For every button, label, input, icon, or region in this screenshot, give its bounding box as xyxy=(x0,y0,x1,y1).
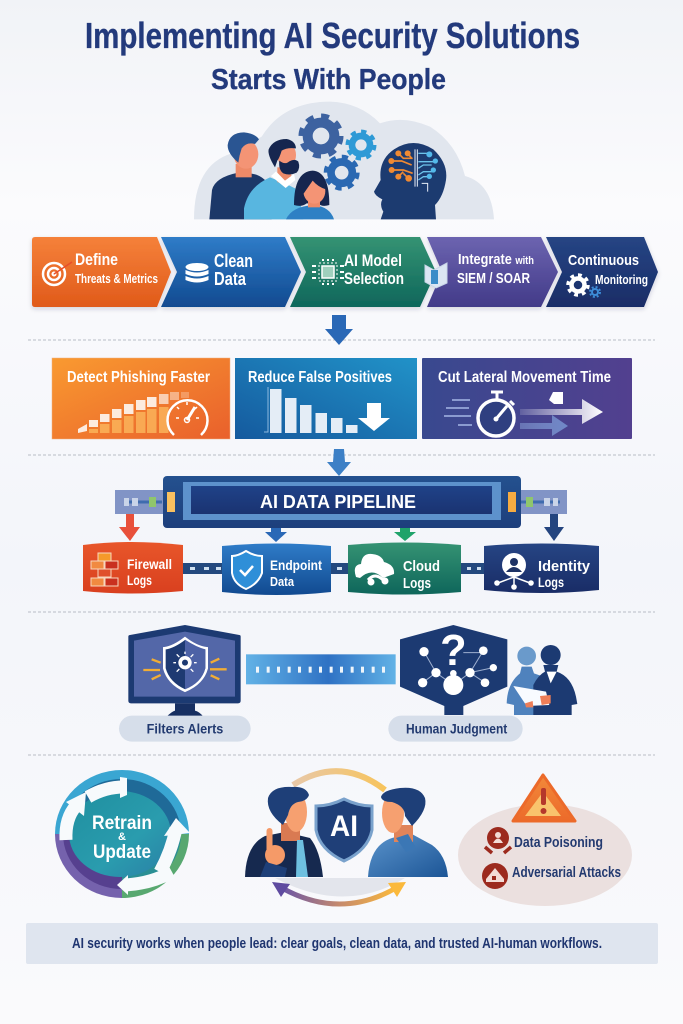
icon: AI shield xyxy=(316,799,372,861)
step: Define threats and metrics: Threats & Metrics xyxy=(75,271,158,286)
arrow: short blue xyxy=(520,415,568,436)
descending bar chart xyxy=(264,387,358,433)
icon: data poisoning xyxy=(485,827,511,853)
firewall logs box: Firewall xyxy=(127,556,172,572)
right connector xyxy=(519,490,567,514)
step: Define threats and metrics xyxy=(32,237,171,307)
step: Integrate with SIEM / SOAR: Integrate with xyxy=(458,251,534,268)
title: Starts With People xyxy=(211,64,446,96)
step: Integrate with SIEM / SOAR xyxy=(425,237,558,307)
rising bars xyxy=(78,392,189,433)
person: woman xyxy=(286,171,334,219)
panel: reduce false positives: Reduce False Positives xyxy=(248,369,392,386)
AI alerts to human judgment section xyxy=(119,625,577,742)
icon: monitor with shield xyxy=(128,625,241,717)
panel: detect phishing faster: Detect Phishing Faster xyxy=(67,369,210,386)
cloud logs box: Cloud xyxy=(403,558,440,575)
label: retrain and update: & xyxy=(118,831,126,843)
icon: shield book xyxy=(425,263,447,288)
label: human judgment: Human Judgment xyxy=(406,720,508,736)
step: Continuous monitoring xyxy=(546,237,658,307)
icon: identity network xyxy=(494,553,534,590)
person: left man xyxy=(245,787,323,877)
step: AI model selection xyxy=(290,237,436,307)
pipeline box xyxy=(163,476,521,528)
step: Clean data: Data xyxy=(214,269,247,289)
arc: top xyxy=(293,771,385,790)
panel: detect phishing faster xyxy=(52,358,230,439)
hero illustration: team, gears and AI head xyxy=(194,102,494,219)
endpoint data box: Data xyxy=(270,574,295,589)
person: man left xyxy=(209,132,272,219)
text: data poisoning: Data Poisoning xyxy=(514,835,603,851)
person: bearded man xyxy=(244,139,303,219)
arrow: long white xyxy=(520,399,603,424)
icon: down arrow xyxy=(358,403,390,431)
icon: brick wall xyxy=(91,553,118,586)
icon: AI head with circuit brain xyxy=(374,143,446,219)
chevron process strip xyxy=(32,237,658,307)
arrow: strip to outcomes xyxy=(325,315,353,345)
step: Continuous monitoring: Continuous xyxy=(568,252,639,269)
identity logs box xyxy=(484,544,599,593)
icon: gauge xyxy=(168,400,208,435)
arrows: pipeline to log sources xyxy=(119,514,564,542)
icon: warning triangle xyxy=(513,775,575,821)
label: filters alerts: Filters Alerts xyxy=(147,720,224,736)
AI human collaboration xyxy=(245,771,448,904)
icon: stopwatch xyxy=(478,392,514,436)
icon: database xyxy=(186,263,208,282)
person: right man xyxy=(368,788,448,877)
label: retrain and update: Update xyxy=(93,842,151,863)
step: Clean data: Clean xyxy=(214,251,253,271)
retrain and update cycle xyxy=(55,770,190,898)
panel: reduce false positives xyxy=(235,358,417,439)
small white marker xyxy=(549,392,563,404)
pipeline box: AI DATA PIPELINE xyxy=(260,491,416,512)
label: filters alerts xyxy=(119,716,251,742)
icon: AI shield: AI xyxy=(330,810,358,843)
connector bar xyxy=(246,654,396,684)
identity logs box: Logs xyxy=(538,574,564,590)
icon: gears xyxy=(568,275,600,297)
left connector xyxy=(115,490,165,514)
summary banner xyxy=(26,923,658,964)
cloud logs box: Logs xyxy=(403,575,431,592)
icon: chip xyxy=(312,259,344,285)
text: adversarial attacks: Adversarial Attacks xyxy=(512,865,621,881)
label: human judgment xyxy=(388,716,523,742)
step: AI model selection: AI Model xyxy=(344,251,402,270)
step: AI model selection: Selection xyxy=(344,269,404,288)
icon: shield check xyxy=(232,551,262,589)
arrow: outcomes to pipeline xyxy=(327,449,351,476)
firewall logs box xyxy=(83,542,183,594)
section dividers xyxy=(28,340,655,755)
outer ring xyxy=(55,770,189,898)
step: Continuous monitoring: Monitoring xyxy=(595,273,648,287)
AI data pipeline xyxy=(115,476,567,528)
step: Integrate with SIEM / SOAR: SIEM / SOAR xyxy=(457,270,530,287)
icon: adversarial attacks xyxy=(482,863,508,889)
endpoint data box: Endpoint xyxy=(270,557,322,573)
speed lines xyxy=(444,400,472,425)
panel: cut lateral movement time: Cut Lateral Movement Time xyxy=(438,369,611,386)
firewall logs box: Logs xyxy=(127,572,152,588)
icon: cloud with signal xyxy=(355,554,394,586)
label: retrain and update xyxy=(92,813,152,863)
label: retrain and update: Retrain xyxy=(92,813,152,834)
base shadow xyxy=(275,878,405,896)
icon: gears xyxy=(301,116,375,189)
title: Implementing AI Security Solutions xyxy=(85,15,580,56)
icon: question network: ? xyxy=(440,627,467,675)
title xyxy=(85,15,580,96)
step: Define threats and metrics: Define xyxy=(75,250,118,269)
identity logs box: Identity xyxy=(538,559,590,575)
arrow: bottom two-way xyxy=(272,882,406,904)
step: Clean data xyxy=(161,237,301,307)
icon: two advisors with paper xyxy=(507,645,577,715)
icon: question network xyxy=(400,625,507,715)
arrows xyxy=(66,787,176,885)
threats callout xyxy=(458,775,632,906)
cloud logs box xyxy=(348,542,461,594)
endpoint data box xyxy=(222,544,331,595)
panel: cut lateral movement time xyxy=(422,358,632,439)
dashed links between log boxes xyxy=(183,563,485,574)
icon: target xyxy=(43,262,72,285)
inner disc xyxy=(69,791,171,877)
cloud backdrop xyxy=(194,102,494,219)
